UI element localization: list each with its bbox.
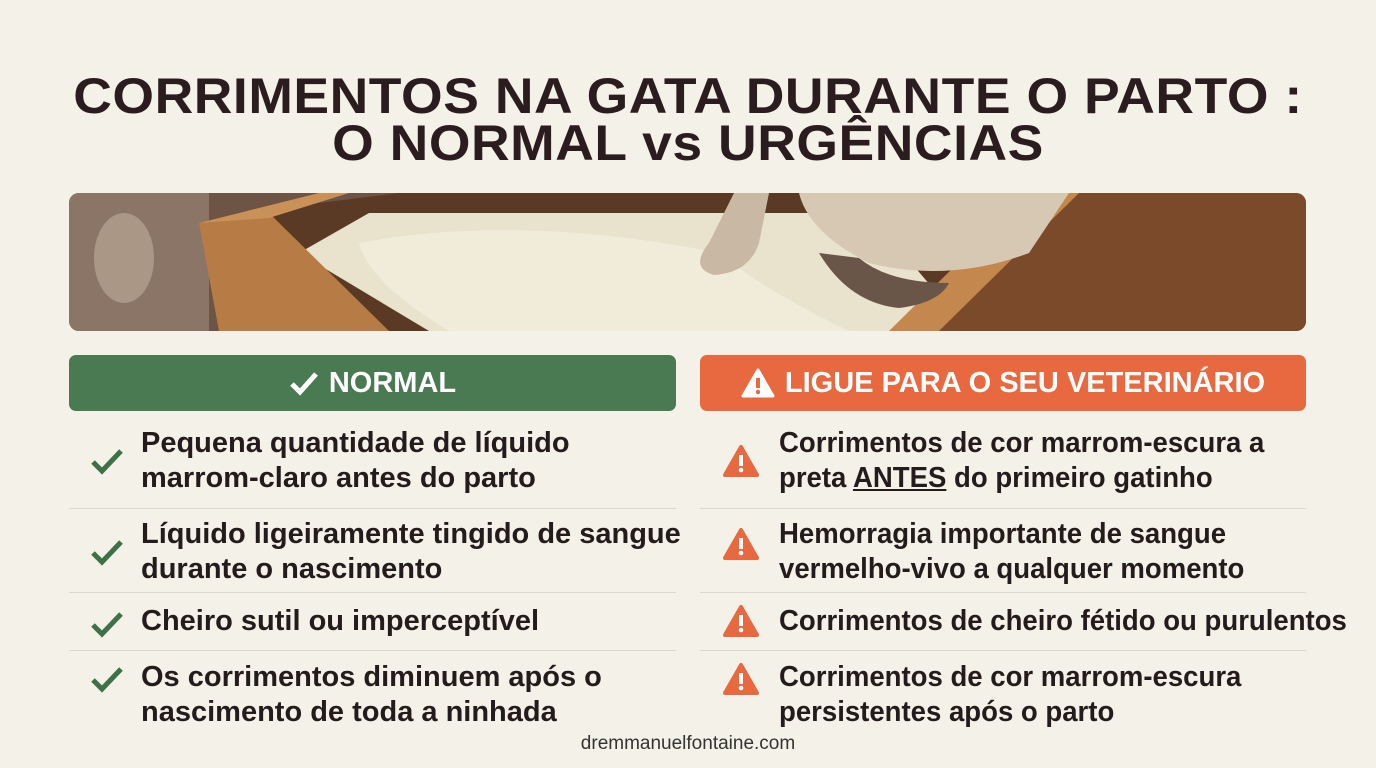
photo banner: cat in whelping box <box>69 193 1306 331</box>
normal item 4 <box>91 661 602 728</box>
normal item 2 <box>91 518 681 585</box>
footer url: dremmanuelfontaine.com <box>581 733 795 754</box>
header: normal <box>69 355 676 411</box>
title <box>73 68 1303 171</box>
header: call vet: LIGUE PARA O SEU VETERINÁRIO <box>785 366 1265 398</box>
urgent item 2 <box>723 518 1244 585</box>
urgent item 4: Corrimentos de cor marrom-escura <box>779 661 1241 693</box>
urgent item 1: preta ANTES do primeiro gatinho <box>779 462 1213 494</box>
normal item 1: marrom-claro antes do parto <box>141 462 536 494</box>
urgent item 4 <box>723 661 1242 728</box>
normal item 2: durante o nascimento <box>141 553 442 585</box>
urgent item 3: Corrimentos de cheiro fétido ou purulentos <box>779 605 1347 637</box>
header: call vet <box>700 355 1306 411</box>
normal item 1 <box>91 427 570 494</box>
normal item 4: nascimento de toda a ninhada <box>141 696 557 728</box>
title: CORRIMENTOS NA GATA DURANTE O PARTO : <box>73 68 1303 124</box>
normal item 1: Pequena quantidade de líquido <box>141 427 570 459</box>
header: normal: NORMAL <box>329 366 456 398</box>
urgent item 4: persistentes após o parto <box>779 696 1114 728</box>
urgent item 1: Corrimentos de cor marrom-escura a <box>779 427 1264 459</box>
normal item 2: Líquido ligeiramente tingido de sangue <box>141 518 681 550</box>
urgent item 2: Hemorragia importante de sangue <box>779 518 1226 550</box>
normal item 3: Cheiro sutil ou imperceptível <box>141 605 539 637</box>
title: O NORMAL vs URGÊNCIAS <box>332 115 1044 171</box>
urgent item 1 <box>723 427 1264 494</box>
urgent item 2: vermelho-vivo a qualquer momento <box>779 553 1244 585</box>
normal item 4: Os corrimentos diminuem após o <box>141 661 602 693</box>
